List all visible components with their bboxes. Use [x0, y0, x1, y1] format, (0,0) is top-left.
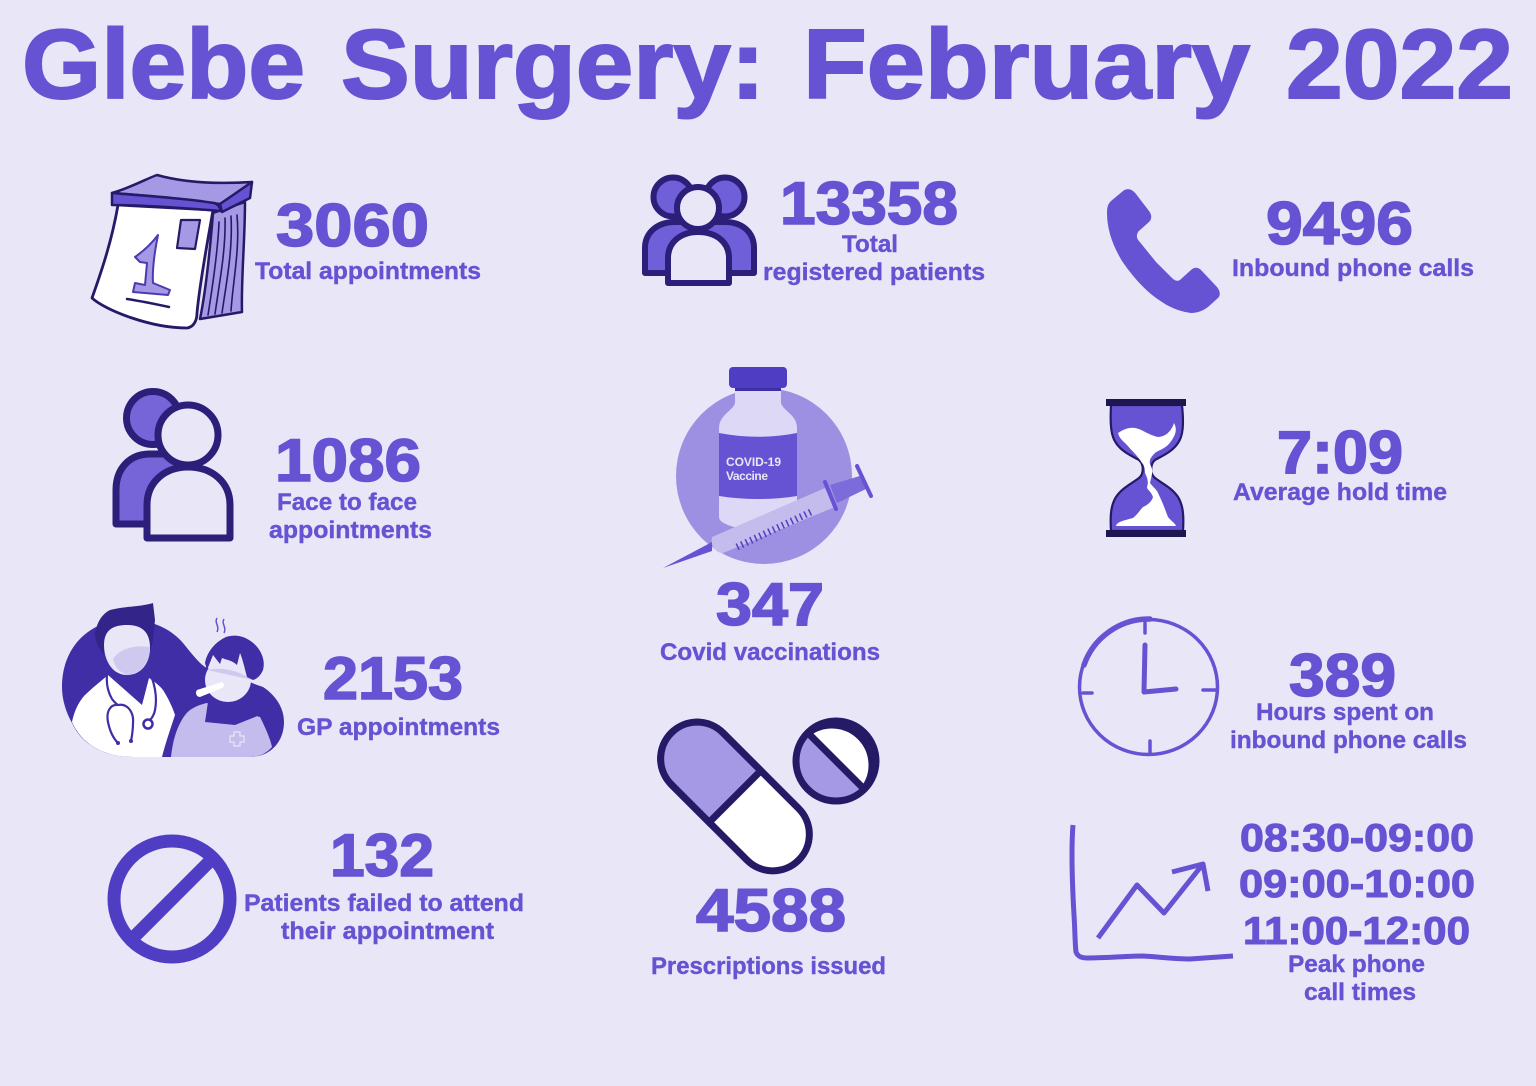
stat: average hold time: 7:09	[1277, 419, 1403, 486]
stat: hours on calls	[1230, 642, 1467, 754]
stat: GP appointments: GP appointments	[297, 714, 500, 741]
title: Glebe	[22, 9, 305, 119]
stat: registered patients: 13358	[780, 170, 958, 237]
icon: no entry sign	[114, 841, 230, 957]
stat: face to face	[269, 427, 432, 544]
stat: total appointments	[255, 192, 481, 285]
stat: hours on calls: Hours spent on	[1256, 699, 1434, 726]
stat: failed to attend: their appointment	[281, 918, 494, 945]
icon: hourglass	[1106, 399, 1186, 537]
icon: calendar	[92, 175, 252, 328]
icon: doctor and patient	[62, 603, 284, 757]
icon: pills	[646, 707, 876, 886]
icon: patients group	[645, 178, 754, 283]
stat: prescriptions: Prescriptions issued	[651, 953, 886, 980]
stat: peak times	[1239, 817, 1475, 1006]
stat: prescriptions	[651, 877, 886, 980]
stat: inbound calls	[1232, 190, 1474, 282]
icon: covid vaccine and syringe	[663, 367, 871, 568]
stat: registered patients: registered patients	[763, 259, 985, 286]
stat: GP appointments: 2153	[323, 645, 463, 712]
icon: telephone	[1107, 189, 1220, 313]
stat: prescriptions: 4588	[696, 877, 846, 944]
icon: two people	[116, 392, 230, 538]
stat: peak times: call times	[1304, 979, 1416, 1006]
stat: peak times: Peak phone	[1288, 951, 1425, 978]
stat: peak times: 08:30-09:00	[1240, 817, 1474, 860]
stat: hours on calls: 389	[1289, 642, 1396, 709]
stat: inbound calls: Inbound phone calls	[1232, 255, 1474, 282]
stat: GP appointments	[297, 645, 500, 741]
icon: rising line chart	[1072, 825, 1233, 959]
icon: clock	[1080, 619, 1218, 754]
stat: face to face: appointments	[269, 517, 432, 544]
stat: covid vaccinations: 347	[716, 571, 824, 638]
stat: average hold time	[1233, 419, 1447, 506]
stat: peak times: 11:00-12:00	[1243, 910, 1470, 953]
icon: covid vaccine and syringe: COVID-19	[726, 455, 781, 469]
stat: average hold time: Average hold time	[1233, 479, 1447, 506]
stat: face to face: Face to face	[277, 489, 417, 516]
stat: total appointments: 3060	[276, 192, 429, 259]
stat: covid vaccinations	[660, 571, 880, 666]
stat: registered patients: Total	[842, 231, 898, 258]
title: 2022	[1286, 9, 1513, 119]
stat: total appointments: Total appointments	[255, 258, 481, 285]
stat: failed to attend	[244, 822, 524, 945]
stat: failed to attend: 132	[330, 822, 434, 889]
title: February	[803, 9, 1250, 119]
stat: failed to attend: Patients failed to attend	[244, 890, 524, 917]
icon: covid vaccine and syringe: Vaccine	[726, 469, 768, 483]
stat: inbound calls: 9496	[1266, 190, 1413, 257]
stat: peak times: 09:00-10:00	[1239, 863, 1475, 906]
title: Surgery:	[341, 9, 765, 119]
stat: hours on calls: inbound phone calls	[1230, 727, 1467, 754]
title	[22, 9, 1513, 119]
stat: face to face: 1086	[275, 427, 421, 494]
stat: registered patients	[763, 170, 985, 286]
stat: covid vaccinations: Covid vaccinations	[660, 639, 880, 666]
